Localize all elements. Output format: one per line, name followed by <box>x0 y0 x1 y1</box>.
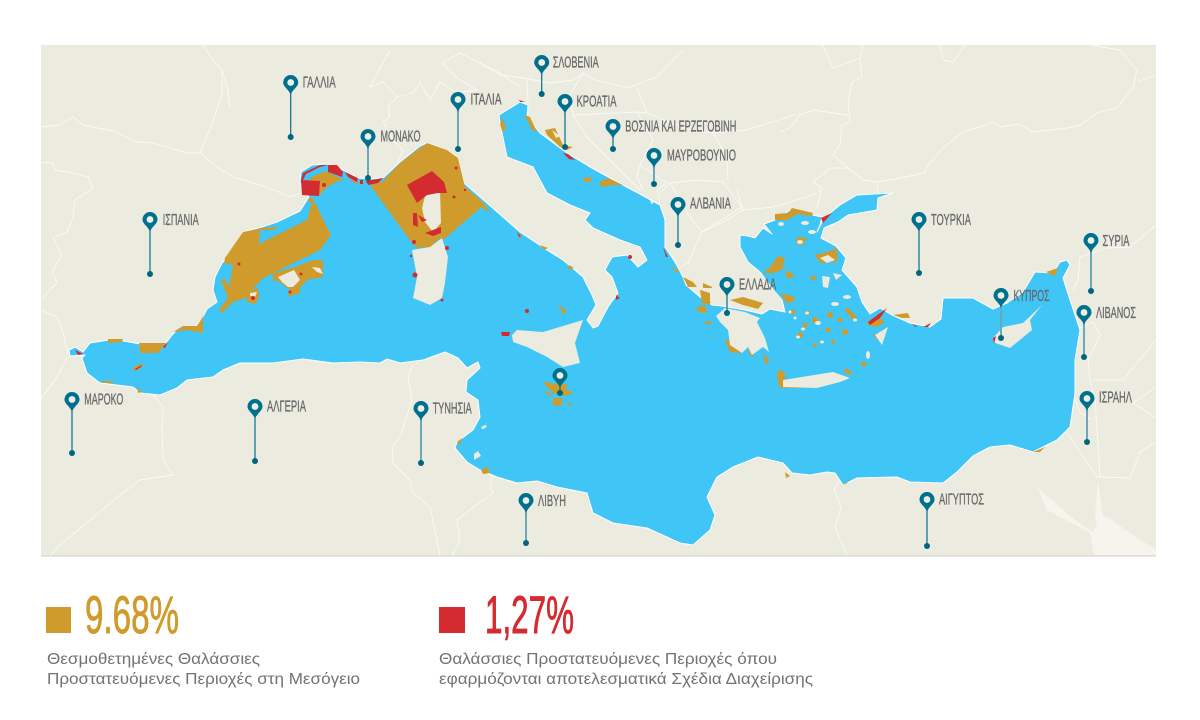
pin: Μαυροβούνιο <box>646 148 736 187</box>
description: managed areas: Θαλάσσιες Προστατευόμενες Περιοχές όπου <box>439 651 777 668</box>
pin: Συρία <box>1084 233 1130 294</box>
gold legend square <box>46 607 71 633</box>
protected areas: red <box>75 100 996 370</box>
pin: Γαλλία: ΓΑΛΛΙΑ <box>303 74 336 92</box>
pin: Μαρόκο <box>64 392 123 456</box>
pin: Λίβανος <box>1076 305 1136 360</box>
protected areas: gold <box>102 115 1058 485</box>
pin: Λίβανος: ΛΙΒΑΝΟΣ <box>1096 305 1136 322</box>
pin: Μάλτα <box>552 368 568 396</box>
pin: Αλβανία: ΑΛΒΑΝΙΑ <box>690 196 731 212</box>
pin: Αλβανία <box>670 196 731 248</box>
pin: Ιταλία <box>450 92 502 152</box>
pin: Μονακό: ΜΟΝΑΚΟ <box>380 128 420 146</box>
description: managed areas: εφαρμόζονται αποτελεσματικά Σχέδια Διαχείρισης <box>439 671 813 688</box>
land: islands <box>250 130 1042 460</box>
legend: effectively managed areas <box>439 586 813 688</box>
pin: Αίγυπτος: ΑΙΓΥΠΤΟΣ <box>939 492 984 508</box>
pin: Ισραήλ <box>1080 390 1132 445</box>
pin: Κροατία: ΚΡΟΑΤΙΑ <box>576 94 617 110</box>
pin: Βοσνία και Ερζεγοβίνη <box>606 118 736 152</box>
sea <box>69 102 1080 545</box>
Rhodes <box>875 327 888 345</box>
Mallorca <box>278 270 300 287</box>
Crete <box>783 372 850 388</box>
statistic 9.68%: 9.68% <box>85 586 179 645</box>
pin: Ισπανία: ΙΣΠΑΝΙΑ <box>163 212 199 229</box>
pin: Λιβύη <box>518 493 566 546</box>
pin: Σλοβενία: ΣΛΟΒΕΝΙΑ <box>553 54 599 72</box>
pin: Ιταλία: ΙΤΑΛΙΑ <box>470 92 502 108</box>
pin: Ισπανία <box>142 212 199 277</box>
Cyprus <box>993 305 1042 348</box>
pin: Μαρόκο: ΜΑΡΟΚΟ <box>84 392 123 408</box>
Evia <box>748 270 782 302</box>
pin: Τουρκία: ΤΟΥΡΚΙΑ <box>931 212 971 229</box>
pin: Κύπρος <box>994 288 1050 341</box>
pin: Ισραήλ: ΙΣΡΑΗΛ <box>1099 390 1132 406</box>
pin: Λιβύη: ΛΙΒΥΗ <box>538 493 566 510</box>
pin: Γαλλία <box>283 74 336 140</box>
pin: Ελλάδα <box>720 276 776 316</box>
pin: Ελλάδα: ΕΛΛΑΔΑ <box>739 276 776 294</box>
description: designated areas: Θεσμοθετημένες Θαλάσσιες <box>47 651 260 668</box>
description: managed areas <box>439 651 813 688</box>
Sicily <box>512 320 583 367</box>
pin: Αίγυπτος <box>920 492 984 549</box>
pin: Αλγερία <box>248 398 306 464</box>
pin: Σλοβενία <box>534 54 599 97</box>
pin: Κροατία <box>558 94 617 150</box>
legend: designated areas <box>46 586 360 688</box>
Corsica <box>422 186 441 232</box>
pin: Τυνησία <box>414 400 472 466</box>
Sardinia <box>412 238 448 305</box>
pin: Μονακό <box>360 128 420 181</box>
pin: Συρία: ΣΥΡΙΑ <box>1102 233 1130 250</box>
pin: Μαυροβούνιο: ΜΑΥΡΟΒΟΥΝΙΟ <box>667 148 736 164</box>
pin: Τυνησία: ΤΥΝΗΣΙΑ <box>433 400 472 418</box>
red legend square <box>439 607 465 633</box>
pin: Τουρκία <box>912 212 971 276</box>
description: designated areas <box>47 651 360 688</box>
map panel <box>40 45 1156 556</box>
description: designated areas: Προστατευόμενες Περιοχές στη Μεσόγειο <box>47 671 360 688</box>
pin: Βοσνία και Ερζεγοβίνη: ΒΟΣΝΙΑ ΚΑΙ ΕΡΖΕΓΟΒΙΝΗ <box>625 118 736 136</box>
pin: Αλγερία: ΑΛΓΕΡΙΑ <box>267 398 306 416</box>
statistic 1,27%: 1,27% <box>485 586 574 645</box>
Red Sea light area <box>1035 480 1156 555</box>
Peloponnese <box>716 308 769 355</box>
pin: Κύπρος: ΚΥΠΡΟΣ <box>1014 288 1050 305</box>
